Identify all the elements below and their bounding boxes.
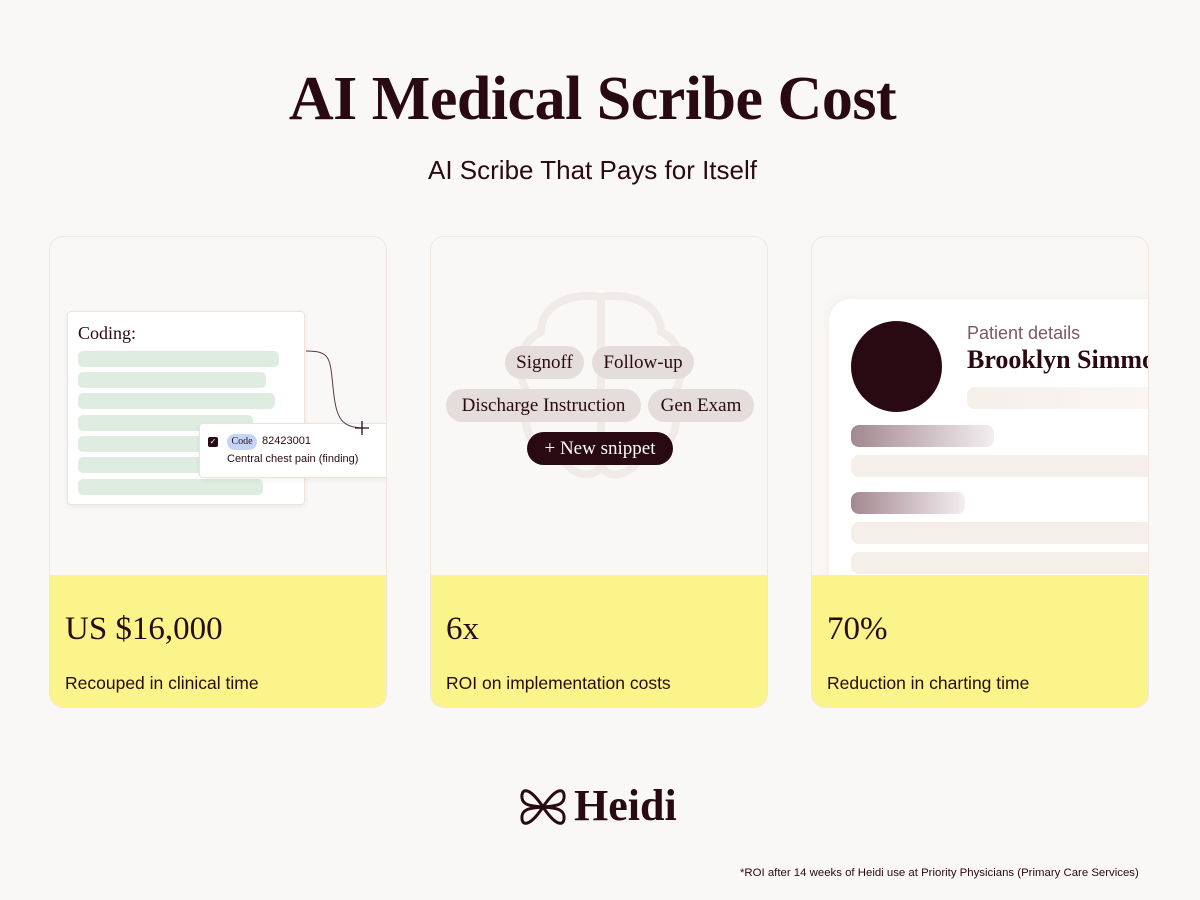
code callout: 82423001: [262, 435, 311, 447]
pills: [505, 346, 584, 379]
code callout: [199, 423, 399, 478]
coding document: Coding:: [78, 323, 136, 343]
icon: brain outline: [518, 292, 684, 478]
logo: Heidi: Heidi: [574, 781, 677, 830]
logo: Heidi: [520, 781, 677, 830]
code callout: Code: [231, 436, 253, 447]
connector line: [306, 350, 369, 435]
title: AI Medical Scribe Cost: [289, 65, 896, 133]
code callout: Central chest pain (finding): [227, 453, 358, 465]
panel: ROI: Discharge Instruction: [462, 395, 625, 416]
subtitle: AI Scribe That Pays for Itself: [428, 155, 757, 185]
new snippet button: [527, 432, 673, 465]
panel: clinical time: Recouped in clinical time: [65, 673, 259, 693]
patient details card: [829, 299, 1169, 599]
new snippet button: + New snippet: [544, 438, 655, 459]
panel: ROI: Follow-up: [603, 352, 683, 373]
panel: ROI: ROI on implementation costs: [446, 673, 671, 693]
panel: ROI: Gen Exam: [661, 395, 741, 416]
footnote: *ROI after 14 weeks of Heidi use at Priority Physicians (Primary Care Services): [740, 867, 1139, 879]
patient details card: Patient details: [967, 323, 1080, 343]
panel: charting time: Reduction in charting time: [827, 673, 1029, 693]
panel: ROI: 6x: [446, 611, 479, 647]
panel: charting time: 70%: [827, 611, 888, 647]
coding document: [67, 311, 305, 505]
panel: clinical time: US $16,000: [65, 611, 223, 647]
panel: ROI: [430, 236, 768, 708]
panel: charting time: [811, 236, 1149, 708]
pills: Signoff: [516, 352, 573, 373]
panel: clinical time: [49, 236, 387, 708]
code callout: ✓: [210, 437, 216, 446]
